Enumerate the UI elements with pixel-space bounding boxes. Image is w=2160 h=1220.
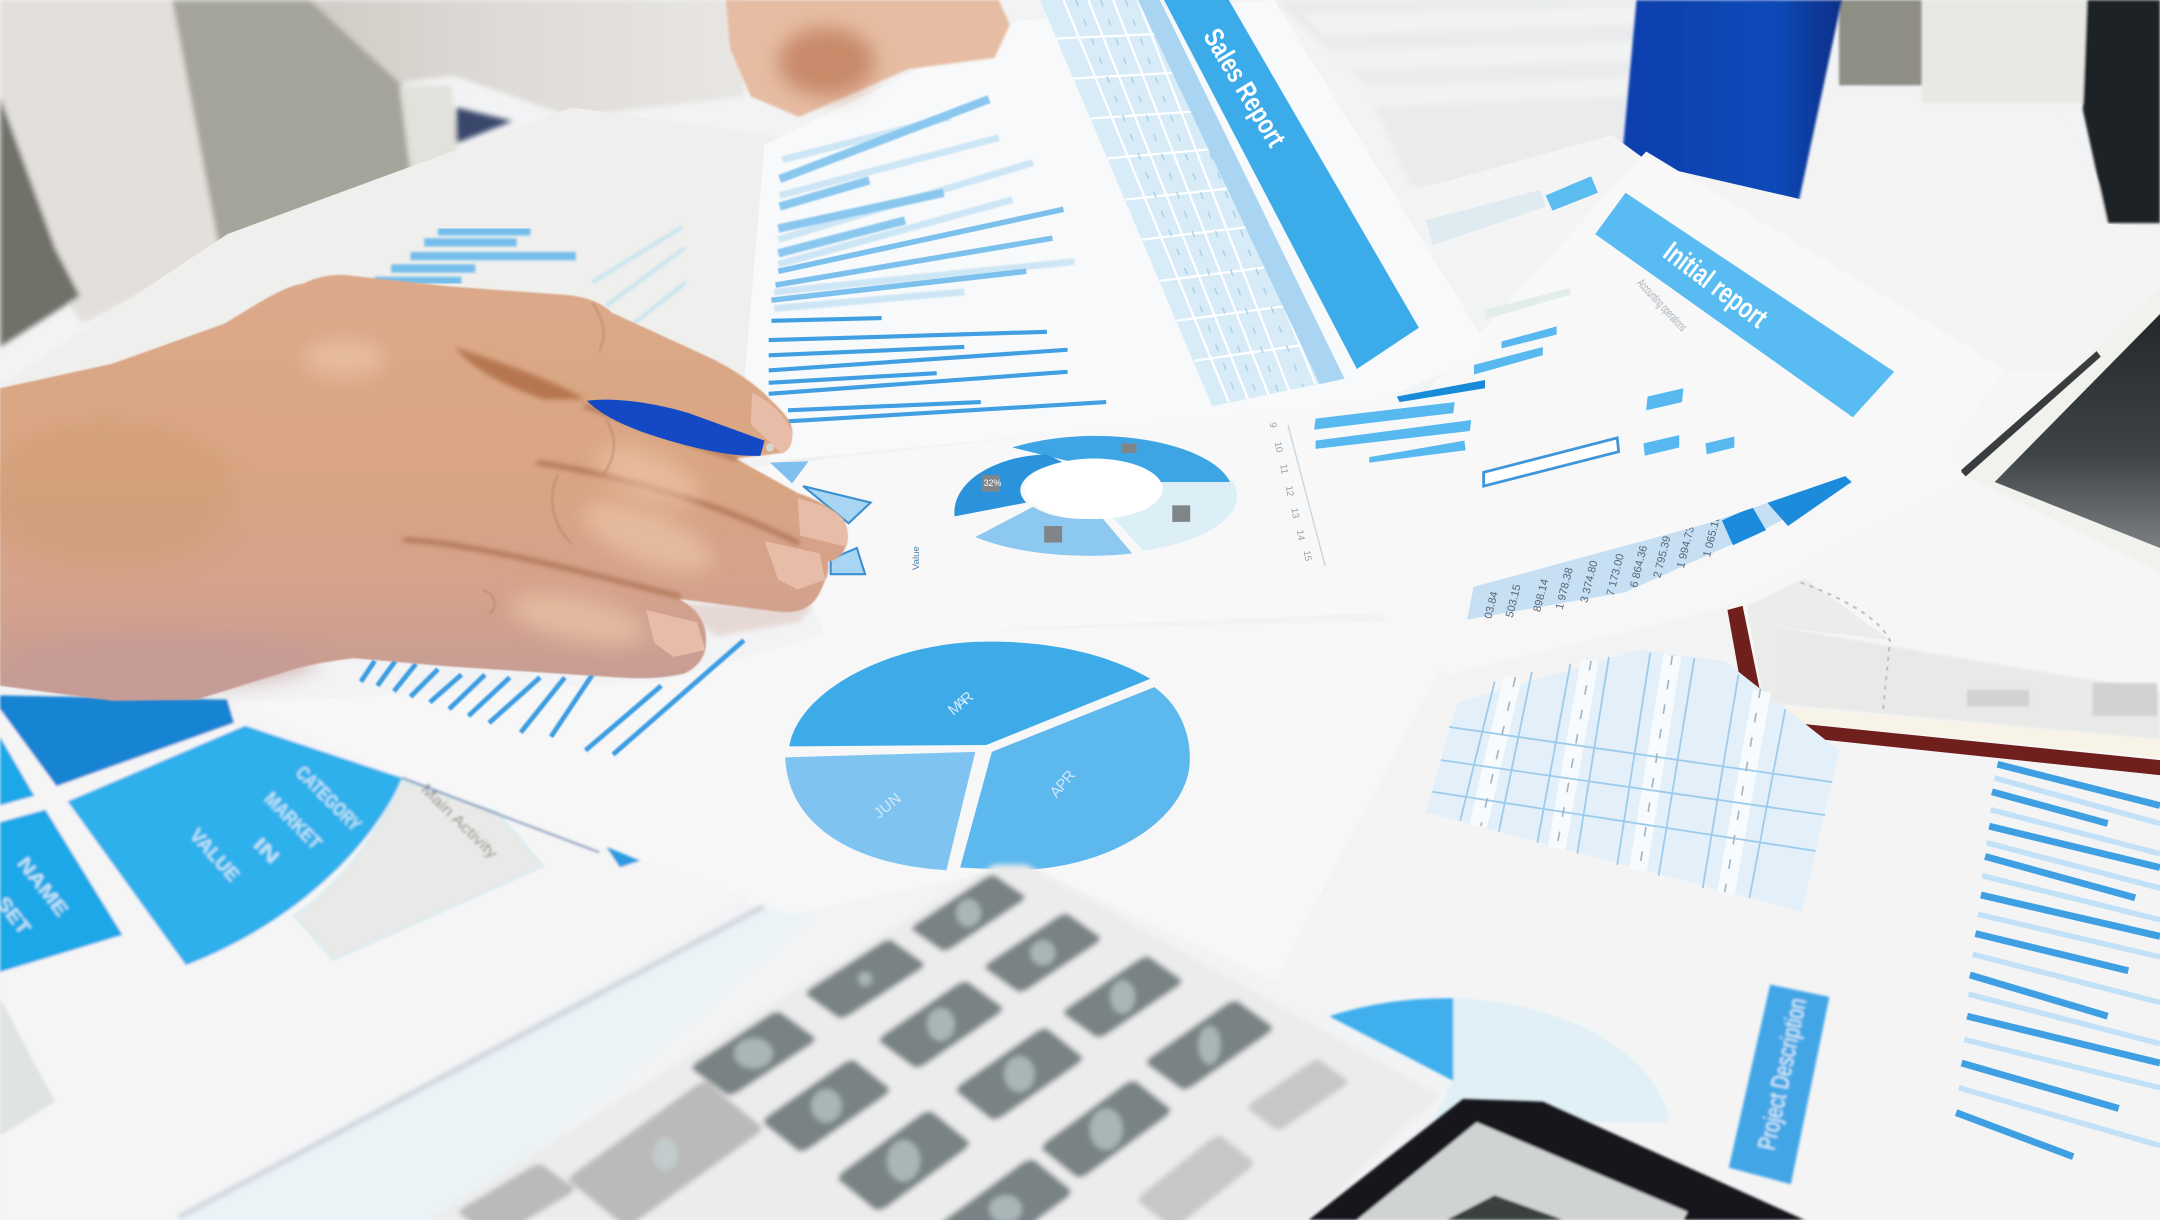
segment labels: NAME (13, 854, 72, 921)
light keys (1135, 1058, 1350, 1220)
pie chart (785, 642, 1190, 870)
large grey keys (456, 1080, 765, 1220)
subheading: Accounting operations (1634, 276, 1690, 334)
background: stack of white paper (1274, 0, 1637, 187)
sales blue band (1164, 0, 1419, 369)
knuckle wrinkles (482, 303, 614, 614)
key legends (653, 899, 1221, 1220)
axis numbers: 9 (1267, 421, 1278, 429)
dashed margin (1800, 582, 1890, 709)
table figures: 2 795.39 (1652, 535, 1674, 579)
sheet: lower left with blue segments (0, 695, 751, 1220)
calculator screen (1309, 1099, 1805, 1220)
outlined bar (1484, 438, 1619, 486)
notebook cover edge (1727, 606, 2160, 775)
page block (1773, 627, 2160, 739)
donut labels: 32% (984, 478, 1002, 488)
axis numbers: 14 (1294, 529, 1307, 542)
axis numbers: 12 (1283, 485, 1295, 497)
segment labels: IN (249, 834, 283, 868)
pen (587, 400, 774, 456)
segment labels (0, 763, 365, 939)
top segment (0, 695, 234, 786)
donut chart (954, 436, 1237, 556)
blurred page tabs (1967, 683, 2157, 716)
legend: Value (911, 546, 922, 570)
far sheet left with bars (0, 107, 827, 468)
sales table (1040, 0, 1344, 406)
shadow of hand on paper (675, 603, 813, 636)
inner page shadow (1747, 578, 1890, 716)
segment labels: CATEGORY (291, 763, 365, 836)
horizontal bar chart (769, 99, 1106, 421)
calculator body (427, 865, 1440, 1220)
notebook with lined pages (1727, 372, 2160, 775)
callout box (295, 781, 543, 960)
small chart bars (1314, 326, 1734, 463)
table figures: 1 994.73 (1675, 525, 1697, 570)
sheet: pie chart (193, 620, 1467, 980)
sheet: initial report (744, 151, 2004, 636)
table figures: 6 864.36 (1628, 544, 1650, 589)
data table (1426, 650, 1839, 912)
table figures: 1 978.38 (1554, 566, 1576, 611)
heading: initial report: Initial report (1657, 236, 1773, 335)
project description tab (1729, 985, 1829, 1184)
bar chart small (361, 640, 744, 755)
table figures: 03.84 (1483, 590, 1501, 620)
table figures: 3 374.80 (1579, 560, 1601, 604)
pie labels: MAR (945, 688, 977, 719)
skin highlights (303, 339, 721, 656)
table values (1481, 655, 1761, 892)
project description tab: Project Description (1754, 996, 1812, 1152)
sheet: lower right with charts (1274, 644, 2160, 1220)
large wedge (68, 726, 402, 965)
back sheet blue tab (1426, 176, 1598, 245)
pie chart: JUN (871, 790, 905, 822)
sheet under initial report with blue table (1378, 435, 1963, 675)
right back sheet (1405, 135, 2160, 454)
sheet: pale strip under calculator (179, 906, 813, 1220)
heading: sales report: Sales Report (1197, 23, 1292, 152)
axis numbers: 11 (1277, 463, 1290, 475)
icon: blue box (1621, 0, 1842, 207)
table figures: 898.14 (1531, 578, 1551, 613)
sheet: sales report (744, 0, 1491, 461)
palm and fingers (0, 275, 848, 701)
top hand holding paper (726, 0, 1010, 117)
axis numbers: 13 (1288, 507, 1301, 519)
cream page edge (1769, 706, 2160, 757)
semi pie chart (1329, 998, 1670, 1122)
lower left segment (0, 810, 123, 972)
right bar chart (1956, 764, 2160, 1157)
table figures: 1 065.10 (1701, 514, 1723, 559)
small area chart (770, 461, 871, 574)
left hand (0, 275, 848, 701)
calculator (427, 865, 1440, 1220)
small left segment (0, 737, 34, 806)
finger shadows (405, 347, 798, 596)
axis numbers (1267, 421, 1313, 562)
table figures: 503.15 (1504, 583, 1524, 619)
segment labels: MARKET (260, 789, 325, 854)
pink lower palm (14, 633, 317, 688)
table figures (1483, 514, 1723, 620)
white alternating columns (1478, 655, 1762, 892)
initial report blue header (1595, 193, 1894, 417)
dark keys (689, 873, 1276, 1220)
blue grid lines (1433, 653, 1832, 898)
background: shirt and office (0, 0, 744, 347)
segment labels: VALUE (185, 825, 243, 886)
black notebook (1960, 286, 2160, 571)
background: desk right and dark corner (1791, 0, 2160, 223)
darker tan back of hand (0, 420, 234, 571)
callout text: Main Activity (417, 781, 501, 862)
axis numbers: 10 (1272, 441, 1284, 453)
table figures: 7 173.00 (1605, 553, 1627, 597)
fingernails (646, 392, 848, 657)
pie chart: APR (1047, 767, 1079, 801)
axis numbers: 15 (1301, 550, 1313, 562)
